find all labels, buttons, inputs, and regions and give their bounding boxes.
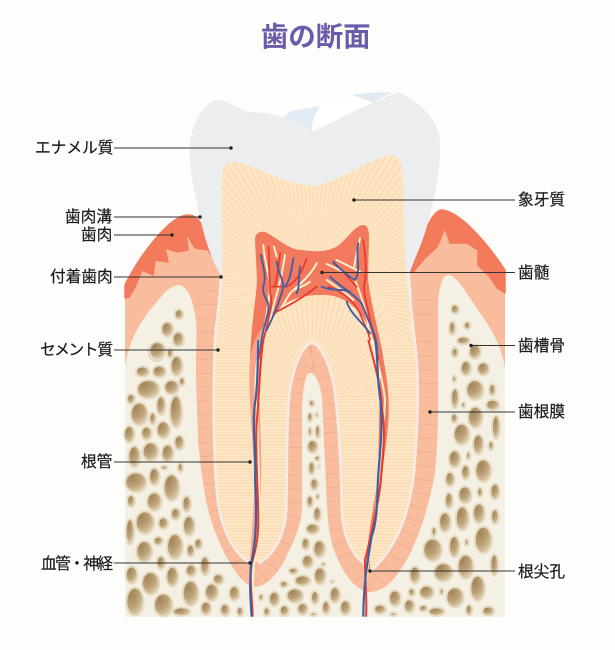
label: apical foramen: 根尖孔	[518, 563, 565, 581]
blood vessels and nerves	[257, 238, 378, 360]
enamel	[190, 92, 440, 300]
periodontal ligament	[196, 272, 438, 592]
label: periodontal ligament: 歯根膜	[518, 403, 565, 421]
label: attached gingiva: 付着歯肉	[50, 268, 113, 286]
label: attached gingiva	[50, 268, 223, 286]
label: gingiva	[81, 226, 174, 244]
label: gingiva: 歯肉	[81, 226, 112, 244]
label: dentin: 象牙質	[518, 191, 565, 209]
label: dentin	[352, 191, 565, 209]
label: periodontal ligament	[428, 403, 565, 421]
label: cementum	[40, 341, 220, 359]
label: enamel: エナメル質	[35, 139, 113, 157]
label: apical foramen	[368, 563, 565, 581]
label: alveolar bone	[469, 337, 565, 355]
cementum	[215, 265, 417, 568]
label: root canal	[81, 453, 252, 471]
bone crest: left	[125, 285, 197, 420]
label: alveolar bone: 歯槽骨	[518, 337, 565, 355]
label: gingival sulcus: 歯肉溝	[65, 208, 112, 226]
bone cavities: upper crest	[149, 305, 481, 359]
label: vessels and nerves	[41, 555, 252, 573]
panel: alveolar bone	[125, 210, 505, 617]
label: pulp	[320, 264, 550, 282]
bone cavities	[124, 339, 500, 616]
labels and leader lines: left	[35, 139, 252, 573]
label: gingival sulcus	[65, 208, 202, 226]
label: cementum: セメント質	[40, 341, 113, 359]
pulp	[249, 225, 389, 617]
label: enamel	[35, 139, 233, 157]
label: root canal: 根管	[81, 453, 112, 471]
label: vessels and nerves: 血管・神経	[41, 555, 113, 573]
dentin	[205, 155, 425, 575]
labels and leader lines: right	[320, 191, 565, 581]
bone crest: right	[438, 275, 505, 420]
title: 歯の断面	[261, 21, 371, 52]
label: pulp: 歯髄	[518, 264, 550, 282]
gum: left	[125, 215, 223, 365]
gum: right	[410, 210, 505, 368]
